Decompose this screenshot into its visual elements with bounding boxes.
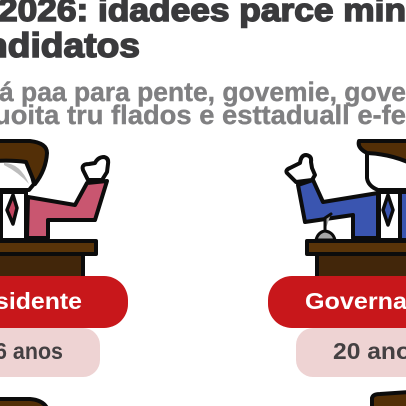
title — [0, 0, 406, 65]
face — [0, 160, 34, 190]
tie — [7, 195, 17, 224]
next row left figure hair — [0, 399, 48, 406]
hair — [359, 141, 406, 163]
desk — [317, 254, 406, 278]
desk — [0, 254, 83, 278]
tie — [383, 195, 393, 225]
shirt — [1, 192, 26, 240]
microphone — [316, 214, 335, 240]
label: governador — [268, 276, 406, 377]
arm — [298, 180, 378, 238]
subtitle — [0, 77, 406, 130]
hair — [0, 141, 47, 184]
arm — [27, 181, 107, 238]
label: governador: 20 ano — [333, 338, 406, 364]
face — [367, 150, 406, 190]
label: governador: Governa — [305, 288, 406, 314]
figure: left politician in pink suit — [0, 141, 108, 278]
subtitle: uoita tru flados e esttaduall e-fe — [0, 100, 406, 130]
figure: right politician in blue suit — [286, 141, 406, 278]
subtitle: á paa para pente, govemie, gove — [0, 77, 406, 107]
far arm — [400, 192, 406, 240]
hand — [286, 155, 315, 182]
next row right figure hair — [372, 392, 406, 406]
label: presidente — [0, 276, 128, 377]
hand — [83, 157, 108, 180]
shirt — [379, 192, 400, 240]
